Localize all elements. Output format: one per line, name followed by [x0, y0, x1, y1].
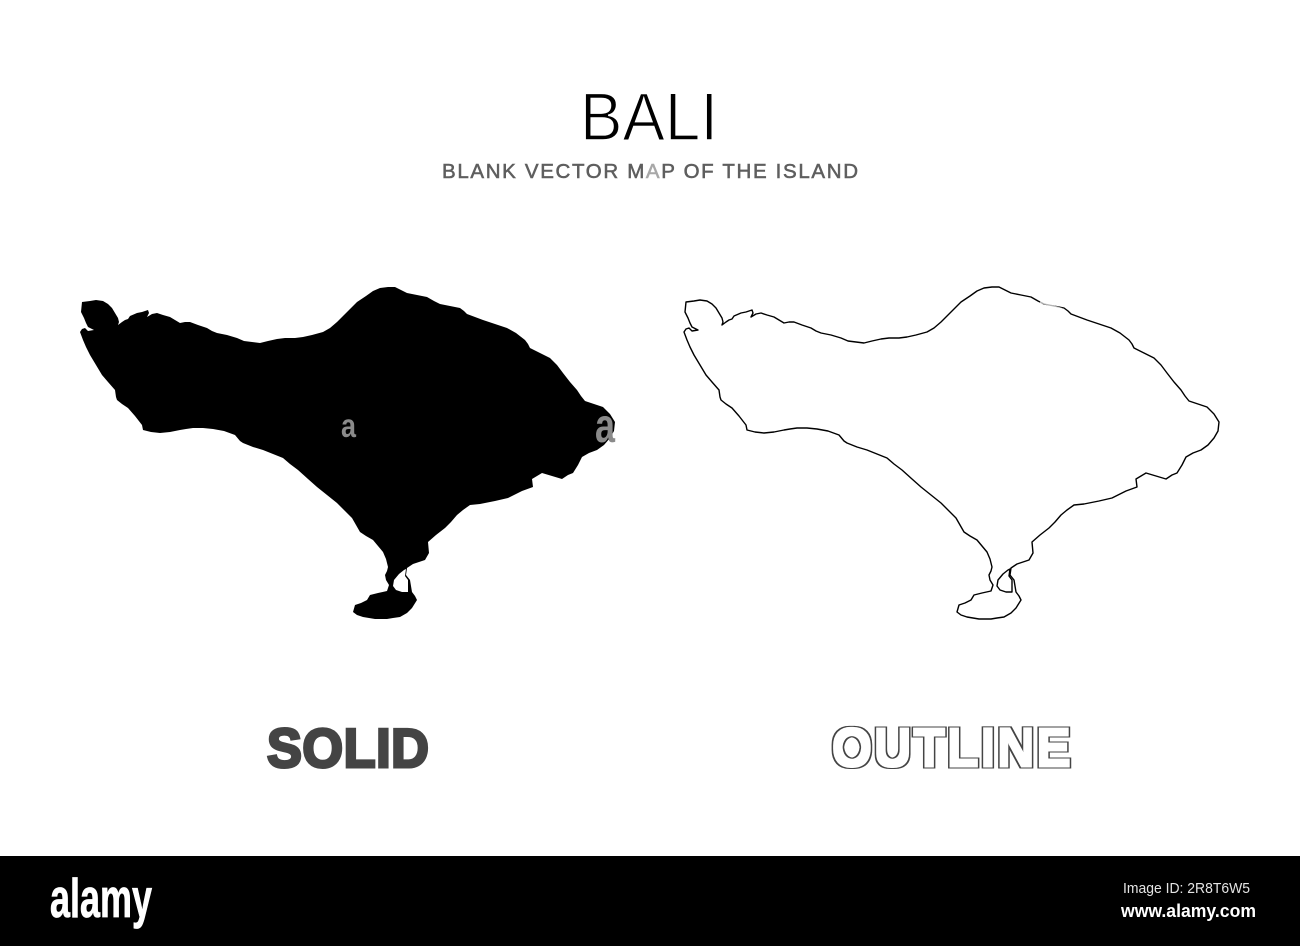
label: outline: OUTLINE [832, 718, 1073, 778]
subtitle: BLANK VECTOR MAP OF THE ISLAND [442, 160, 858, 183]
footer logo: alamy [50, 867, 152, 929]
footer bar [0, 856, 1300, 946]
map: outline of Bali [684, 287, 1219, 619]
title: BALI [580, 79, 718, 155]
watermark letter on island centre: a [341, 407, 357, 444]
map: solid silhouette of Bali [80, 287, 615, 619]
image id: Image ID: 2R8T6W5 [1123, 880, 1250, 897]
website: www.alamy.com [1120, 901, 1256, 921]
label: solid: SOLID [267, 718, 429, 779]
watermark letter on east coast: a [595, 400, 615, 453]
